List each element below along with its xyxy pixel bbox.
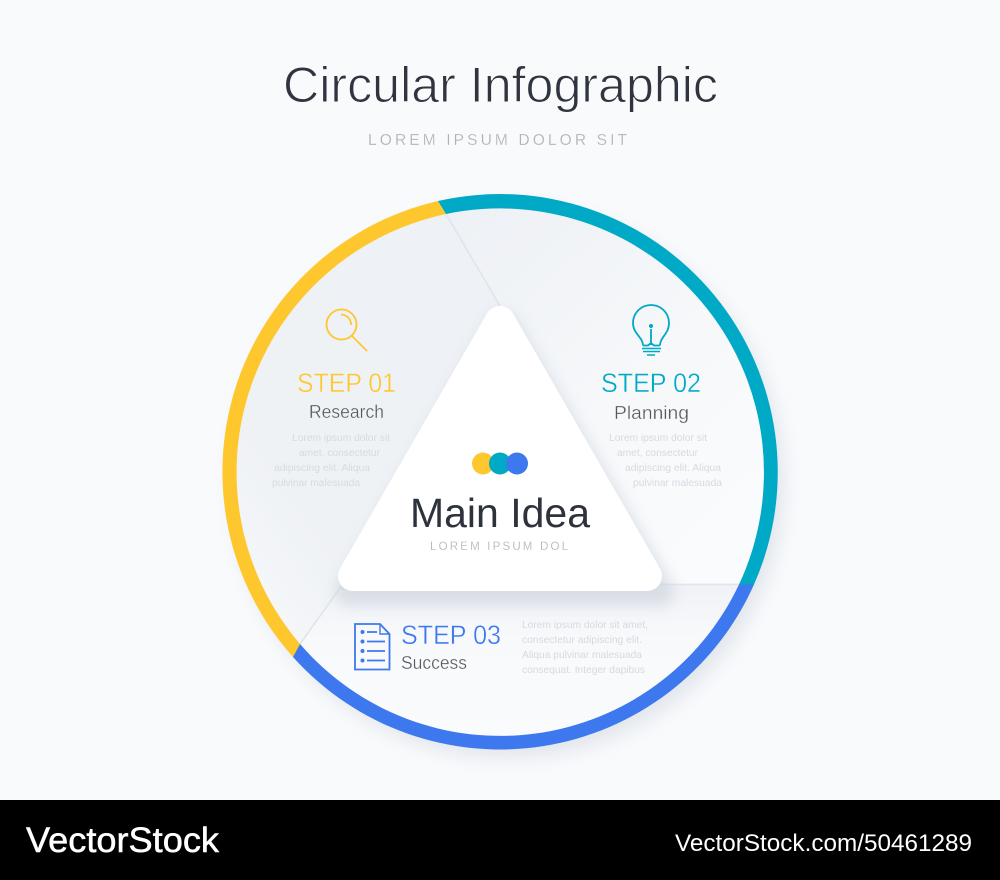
step 03 block — [355, 620, 648, 676]
step 02 body: pulvinar malesuada — [633, 478, 722, 489]
step 03 body: Lorem ipsum dolor sit amet, — [522, 620, 648, 631]
step 01 body: pulvinar malesuada — [272, 478, 360, 489]
step 02 body: Lorem ipsum dolor sit — [609, 433, 707, 444]
panel: step 02 wedge — [446, 208, 764, 584]
step 02 name: Planning — [614, 403, 689, 423]
watermark bar — [0, 800, 1000, 880]
watermark url: VectorStock.com/50461289 — [675, 830, 972, 857]
step 03 body: consectetur adipiscing elit. — [522, 635, 642, 646]
step 01 name: Research — [309, 402, 384, 422]
step 03 body: Aliqua pulvinar malesuada — [522, 650, 642, 661]
triangle shadow — [335, 310, 674, 606]
icon: document checklist — [355, 624, 390, 670]
step 03 body: consequat. Integer dapibus — [522, 665, 645, 676]
icon: light bulb — [633, 305, 669, 355]
subtitle: LOREM IPSUM DOLOR SIT — [368, 132, 628, 149]
title: Circular Infographic — [283, 57, 718, 113]
ring segment: teal — [438, 194, 778, 584]
step 01 label: STEP 01 — [297, 368, 396, 398]
main idea heading: Main Idea — [410, 490, 590, 536]
panel: central triangle — [338, 306, 662, 591]
step 02 block — [601, 305, 722, 489]
panel: step 03 wedge — [300, 584, 739, 736]
step 01 block — [272, 310, 396, 489]
circle drop shadow — [232, 206, 784, 758]
icon: magnifier — [326, 310, 367, 351]
panel: step 01 wedge — [237, 214, 500, 644]
ring segment: blue — [293, 584, 754, 749]
step 02 body: adipiscing elit. Aliqua — [625, 463, 721, 474]
watermark logo text: VectorStock — [26, 821, 220, 860]
step 01 body: Lorem ipsum dolor sit — [292, 433, 390, 444]
circular diagram — [222, 194, 784, 758]
step 03 name: Success — [401, 653, 467, 673]
step 02 body: amet, consectetur — [617, 448, 699, 459]
ring segment: yellow — [222, 201, 446, 657]
step 01 body: adipiscing elit. Aliqua — [274, 463, 370, 474]
three overlapping dots — [472, 452, 528, 474]
step 02 label: STEP 02 — [601, 368, 701, 398]
wedge dividers — [300, 214, 740, 644]
step 01 body: amet, consectetur — [299, 448, 381, 459]
main idea subtitle: LOREM IPSUM DOL — [430, 541, 569, 553]
step 03 body — [522, 620, 648, 676]
step 02 body — [609, 433, 722, 489]
step 03 label: STEP 03 — [401, 620, 501, 650]
step 01 body — [272, 433, 390, 489]
